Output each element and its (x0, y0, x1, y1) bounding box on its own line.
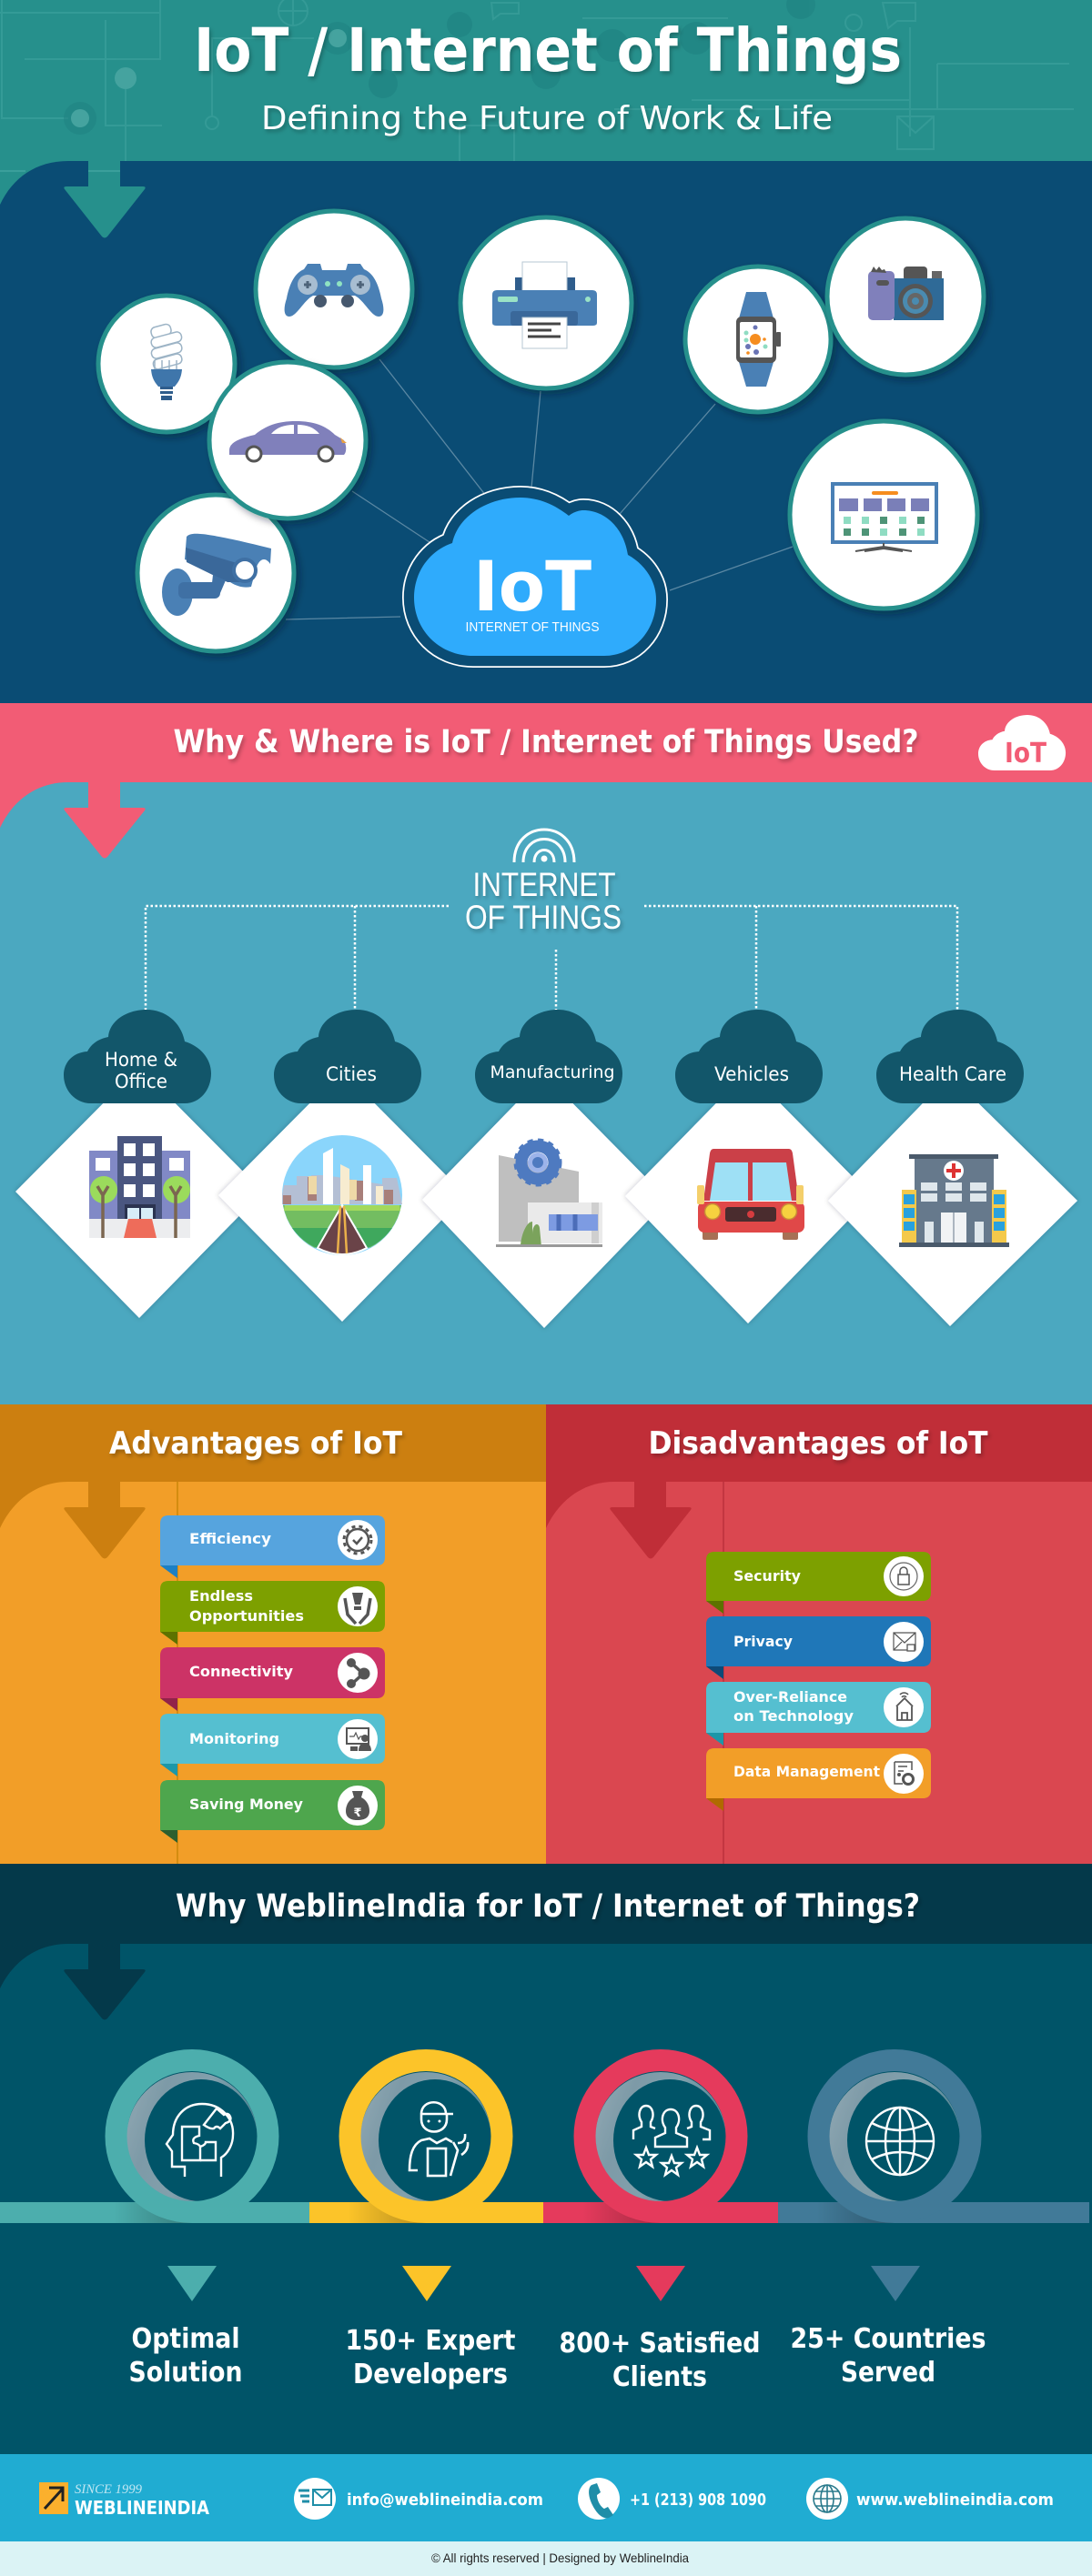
ribbon: privacy: Privacy (733, 1633, 794, 1650)
text: countries served (790, 2323, 986, 2389)
cloud: health care: Health Care (899, 1063, 1006, 1085)
cloud: home and office: Home & (105, 1049, 177, 1071)
diamond: vehicles (625, 1071, 872, 1323)
heading: subtitle: Defining the Future of Work & Life (261, 100, 833, 137)
heading: main title (194, 15, 902, 137)
marker: red triangle (636, 2266, 685, 2301)
ribbon: over-reliance on technology (706, 1682, 931, 1746)
contact: phone: +1 (213) 908 1090 (630, 2490, 766, 2510)
cloud: cities (274, 1010, 421, 1103)
ribbon: endless opportunities: Endless (189, 1587, 253, 1605)
text: optimal solution: Optimal (131, 2323, 240, 2355)
diamond: cities (218, 1071, 466, 1322)
icon: car circle (209, 362, 366, 518)
cloud: health care (876, 1010, 1024, 1103)
cloud: vehicles (675, 1010, 823, 1103)
panel: advantages (0, 1404, 546, 1864)
ring: countries served (778, 2060, 1089, 2223)
ring: satisfied clients (543, 2060, 778, 2223)
marker: yellow triangle (402, 2266, 451, 2301)
icon: small IoT cloud: IoT (1005, 738, 1046, 770)
ribbon: saving money: ₹ (353, 1806, 362, 1820)
icon: developer with wrench (410, 2102, 468, 2176)
icon: central IoT cloud: INTERNET OF THINGS (466, 619, 599, 635)
icon: gamepad circle (256, 211, 412, 367)
marker: blue triangle (871, 2266, 920, 2301)
panel: why and where (0, 703, 1092, 1404)
text: optimal solution (129, 2323, 242, 2389)
icon: printer circle (460, 217, 632, 388)
ribbon: monitoring (160, 1714, 385, 1776)
panel: disadvantages (546, 1404, 1092, 1864)
ribbon: endless opportunities: Opportunities (189, 1607, 304, 1625)
section background: header teal (0, 0, 1092, 218)
connector lines (286, 359, 793, 619)
icon: office building (89, 1136, 190, 1238)
marker: teal triangle (167, 2266, 217, 2301)
heading: internet of things hub: INTERNET (473, 866, 615, 903)
contact: email: info@weblineindia.com (347, 2490, 543, 2510)
cloud: vehicles: Vehicles (714, 1063, 789, 1085)
ring: expert developers (309, 2060, 543, 2223)
icon: red bus front (697, 1149, 804, 1240)
icon: clients and stars (633, 2106, 710, 2175)
cloud: home and office: Office (115, 1071, 167, 1092)
heading: main title: IoT / Internet of Things (194, 15, 902, 86)
heading: why weblineindia: Why WeblineIndia for IoT / Internet of Things? (176, 1888, 920, 1925)
footer: contact bar (0, 2454, 1092, 2541)
ring: optimal solution (0, 2060, 309, 2223)
ribbon: data management (706, 1748, 931, 1811)
icon: camera circle (827, 218, 984, 375)
heading: internet of things hub: OF THINGS (465, 899, 622, 936)
diamond: home and office (15, 1067, 263, 1318)
text: satisfied clients (559, 2328, 761, 2393)
ribbon: efficiency (160, 1515, 385, 1578)
cloud: home and office (64, 1010, 211, 1103)
connector dotted lines (146, 906, 957, 1010)
text: satisfied clients: Clients (612, 2361, 707, 2393)
ribbon: monitoring: Monitoring (189, 1730, 279, 1747)
arrow: header (64, 161, 146, 238)
ribbon: endless opportunities (160, 1581, 385, 1645)
ribbon: privacy (706, 1616, 931, 1679)
ribbon: over-reliance on technology: Over-Reliance (733, 1688, 847, 1706)
diamond: manufacturing (422, 1074, 668, 1328)
logo: weblineindia: SINCE 1999 (75, 2482, 142, 2497)
arrow: why weblineindia (64, 1944, 146, 2019)
heading: why and where: Why & Where is IoT / Internet of Things Used? (173, 724, 919, 760)
icon: city skyline and road (282, 1135, 402, 1255)
text: satisfied clients: 800+ Satisfied (559, 2328, 761, 2360)
icon: smartwatch circle (685, 267, 831, 412)
icon: bulb circle (98, 296, 235, 432)
arrow: disadvantages (610, 1482, 692, 1559)
diamond: health care (828, 1075, 1077, 1326)
ribbon: efficiency: Efficiency (189, 1530, 272, 1547)
panel: hero network (0, 161, 1092, 703)
panel: why weblineindia (0, 1864, 1092, 2454)
icon: central IoT cloud: IoT (473, 546, 592, 627)
contact: email (294, 2478, 543, 2520)
text: optimal solution: Solution (129, 2357, 242, 2389)
icon: wifi signal (514, 830, 574, 862)
ribbon: connectivity: Connectivity (189, 1663, 294, 1680)
heading: internet of things hub (465, 866, 622, 936)
cloud: manufacturing: Manufacturing (490, 1062, 615, 1082)
ribbon: over-reliance on technology: on Technology (733, 1707, 854, 1725)
arrow: section two (64, 782, 146, 859)
ribbon: connectivity (160, 1647, 385, 1711)
text: expert developers (346, 2325, 515, 2390)
icon: small IoT cloud (978, 715, 1066, 770)
icon: head with puzzle (167, 2104, 233, 2177)
ribbon: security: Security (733, 1567, 802, 1585)
heading: disadvantages: Disadvantages of IoT (648, 1425, 988, 1462)
icon: central IoT cloud (414, 498, 656, 656)
icon: hospital (899, 1154, 1009, 1247)
contact: phone (578, 2478, 766, 2520)
arrow: advantages (64, 1482, 146, 1559)
icon: factory with gear (496, 1141, 602, 1247)
heading: advantages: Advantages of IoT (109, 1425, 403, 1462)
cloud: manufacturing (475, 1010, 622, 1103)
cloud: cities: Cities (326, 1063, 377, 1085)
circuit pattern (0, 0, 1074, 162)
ribbon: data management: Data Management (733, 1763, 880, 1780)
icon: cctv circle (137, 495, 294, 651)
footer: copyright (0, 2541, 1092, 2576)
text: expert developers: Developers (353, 2359, 508, 2390)
ribbon: saving money (160, 1780, 385, 1843)
text: expert developers: 150+ Expert (346, 2325, 515, 2357)
logo: weblineindia (39, 2482, 209, 2519)
icon: dashboard tv circle (790, 421, 977, 609)
text: countries served: 25+ Countries (790, 2323, 986, 2355)
icon: globe (866, 2108, 934, 2175)
footer: copyright: © All rights reserved | Designed by WeblineIndia (431, 2551, 689, 2565)
logo: weblineindia: WEBLINEINDIA (75, 2497, 209, 2519)
text: countries served: Served (841, 2357, 935, 2389)
ribbon: security (706, 1552, 931, 1614)
contact: website: www.weblineindia.com (856, 2490, 1054, 2510)
contact: website (806, 2478, 1054, 2520)
ribbon: saving money: Saving Money (189, 1796, 304, 1813)
